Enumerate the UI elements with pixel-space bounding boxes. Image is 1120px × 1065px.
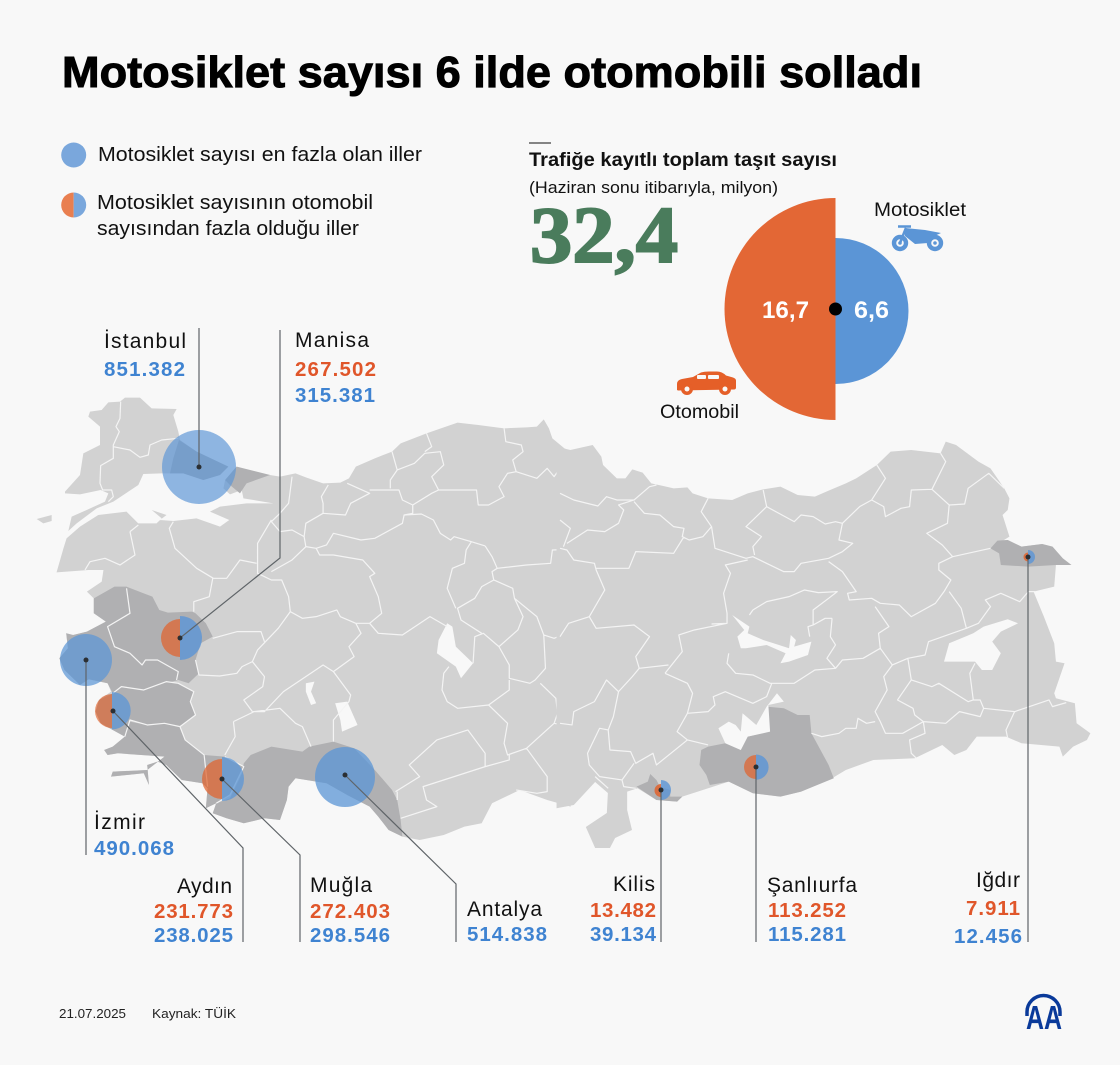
map: western half (57, 419, 571, 840)
motorcycle label: Motosiklet (874, 200, 967, 221)
label: Aydin (154, 875, 233, 947)
icon: car (677, 372, 736, 395)
label: Sanliurfa: 113.252 (768, 899, 846, 922)
label: Istanbul: 851.382 (104, 358, 185, 381)
marker: Sanliurfa (744, 754, 769, 780)
label: Sanliurfa: Şanlıurfa (767, 874, 857, 897)
marker: Aydin (95, 692, 131, 729)
label: Kilis (590, 873, 657, 946)
marker: Kilis (655, 780, 671, 800)
icon: motorcycle (894, 226, 941, 249)
label: Kilis: 13.482 (590, 899, 656, 922)
label: Aydin: 238.025 (154, 924, 233, 947)
label: Mugla (310, 874, 390, 947)
label: Igdir: 7.911 (966, 897, 1020, 920)
label: Kilis: Kilis (613, 873, 655, 896)
legend item: most motorcycles: Motosiklet sayısı en fazla olan iller (98, 144, 422, 166)
label: Manisa: 315.381 (295, 384, 375, 407)
label: Igdir: 12.456 (954, 925, 1022, 948)
marker: Istanbul (162, 430, 236, 504)
title: Motosiklet sayısı 6 ilde otomobili solladı (62, 48, 922, 97)
half circle chart: 6,6 (854, 297, 889, 324)
marker: Izmir (60, 634, 112, 686)
label: Igdir: Iğdır (976, 869, 1020, 892)
label: Sanliurfa (767, 874, 857, 946)
label: Aydin: Aydın (177, 875, 232, 898)
car label: Otomobil (660, 402, 739, 423)
logo: AA: AA (1026, 999, 1062, 1036)
label: Antalya: Antalya (467, 898, 542, 921)
label: Mugla: Muğla (310, 874, 372, 897)
highlighted provinces: Kocaeli side, Manisa, Izmir, Aydin, Mugla, Antalya (59, 467, 402, 837)
marker: Igdir (1024, 550, 1035, 564)
label: Igdir (954, 869, 1022, 948)
label: Antalya (467, 898, 547, 946)
legend (61, 142, 422, 240)
lakes and dams (718, 615, 1018, 750)
label: Mugla: 272.403 (310, 900, 390, 923)
marker: Manisa (161, 616, 202, 660)
panel: total vehicles (529, 143, 967, 423)
label: Mugla: 298.546 (310, 924, 390, 947)
label: Kilis: 39.134 (590, 923, 657, 946)
half circle chart: 16,7 (762, 297, 809, 324)
marker: Mugla (202, 757, 244, 801)
legend item: motorcycles exceed cars: sayısından fazla olduğu iller (97, 218, 359, 240)
half circle chart (724, 198, 908, 420)
label: Sanliurfa: 115.281 (768, 923, 846, 946)
map: Thrace (37, 398, 228, 531)
label: Istanbul (104, 330, 186, 381)
marker: Antalya (315, 747, 375, 807)
label: Antalya: 514.838 (467, 923, 547, 946)
label: Istanbul: İstanbul (104, 330, 186, 353)
label: Izmir: 490.068 (94, 837, 174, 860)
lakes (306, 623, 473, 732)
Istanbul province (170, 440, 228, 480)
panel heading: Trafiğe kayıtlı toplam taşıt sayısı (529, 149, 837, 171)
footer source: Kaynak: TÜİK (152, 1006, 236, 1021)
leader lines and dots (84, 328, 1030, 942)
map: Marmara province borders (85, 522, 257, 578)
label: Izmir: İzmir (94, 811, 145, 834)
label: Aydin: 231.773 (154, 900, 233, 923)
map of Turkey (37, 398, 1090, 848)
label: Manisa: Manisa (295, 329, 369, 352)
map: eastern half (557, 442, 1090, 848)
total number: 32,4 (530, 192, 678, 280)
label: Manisa: 267.502 (295, 358, 376, 381)
panel subheading: (Haziran sonu itibarıyla, milyon) (529, 179, 778, 197)
highlighted provinces: Sanliurfa, Kilis, Igdir (636, 540, 1071, 802)
legend item: motorcycles exceed cars (61, 192, 373, 240)
label: Manisa (295, 329, 376, 407)
label: Izmir (94, 811, 174, 860)
legend item: motorcycles exceed cars: Motosiklet sayısının otomobil (97, 192, 373, 214)
footer date: 21.07.2025 (59, 1006, 126, 1021)
